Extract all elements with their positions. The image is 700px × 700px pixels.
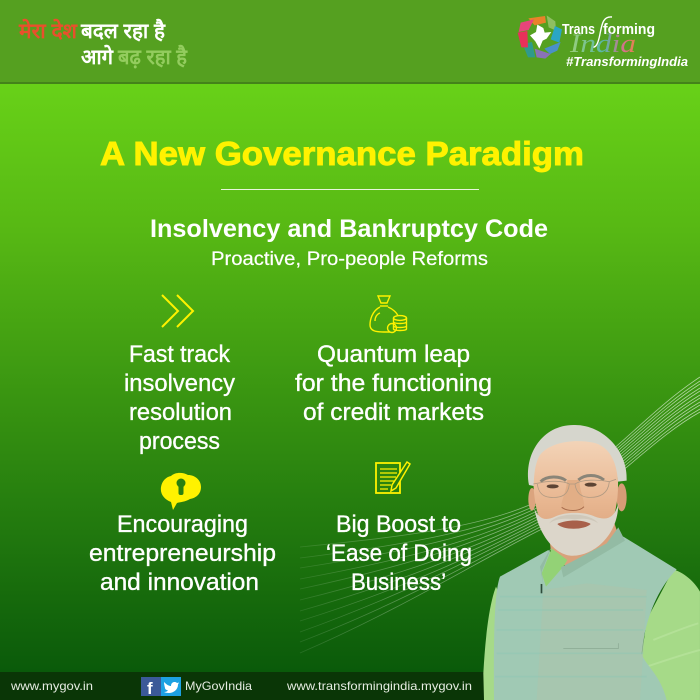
text: entrepreneurship: entrepreneurship	[89, 540, 276, 567]
transforming india logo: forming	[603, 21, 655, 38]
text: quantum leap: of credit markets	[303, 399, 484, 426]
transforming india logo: #TransformingIndia	[566, 54, 688, 69]
text: fast track	[124, 341, 235, 455]
icon: money bag	[370, 296, 406, 332]
text: entrepreneurship	[89, 511, 276, 596]
title divider	[221, 189, 479, 190]
hindi slogan: बढ़ रहा है	[117, 44, 188, 69]
eyebrows	[541, 475, 604, 482]
ears	[528, 488, 536, 511]
footer handle: MyGovIndia	[185, 679, 252, 693]
text: fast track: resolution	[129, 399, 232, 426]
footer website: www.mygov.in	[10, 679, 93, 693]
mustache and lips	[549, 515, 598, 523]
item: entrepreneurship	[89, 473, 276, 596]
icon: facebook	[141, 677, 161, 698]
portrait	[483, 425, 700, 700]
hindi slogan	[18, 18, 188, 69]
face	[533, 438, 618, 547]
transforming india logo	[518, 15, 688, 69]
decorative wave lines	[300, 377, 700, 653]
hindi slogan: मेरा देश	[18, 18, 78, 43]
shirt sleeves	[483, 569, 700, 700]
shirt collar	[542, 548, 567, 587]
text: ease of doing business: ‘Ease of Doing	[326, 540, 472, 567]
text: fast track: Fast track	[129, 341, 231, 368]
nose	[561, 480, 584, 510]
transforming india logo: Trans	[562, 21, 595, 38]
text: quantum leap: for the functioning	[295, 370, 492, 397]
jacket collar	[540, 527, 625, 585]
icon: facebook: f	[147, 679, 153, 698]
text: fast track: insolvency	[124, 370, 235, 397]
icon: twitter	[161, 677, 181, 696]
tagline: Proactive, Pro-people Reforms	[211, 249, 488, 270]
icon: notepad and pen	[376, 462, 410, 493]
item: ease of doing business	[326, 462, 472, 596]
hindi slogan: आगे	[81, 44, 114, 69]
text: entrepreneurship: and innovation	[100, 569, 259, 596]
title: A New Governance Paradigm	[100, 135, 584, 172]
icon: double chevron	[162, 295, 193, 327]
header bar	[0, 0, 700, 84]
text: quantum leap	[295, 341, 492, 426]
text: quantum leap: Quantum leap	[317, 341, 470, 368]
transforming india logo: India	[569, 29, 636, 58]
item: quantum leap	[295, 296, 492, 426]
jacket	[494, 537, 677, 700]
neck	[548, 520, 620, 567]
subtitle: Insolvency and Bankruptcy Code	[150, 215, 548, 243]
footer portal url: www.transformingindia.mygov.in	[286, 679, 472, 693]
footer bar	[0, 672, 700, 700]
glasses	[533, 479, 616, 497]
text: fast track: process	[139, 428, 220, 455]
text: ease of doing business: Business’	[351, 569, 446, 596]
eyes	[547, 484, 559, 488]
hair	[528, 425, 627, 486]
text: ease of doing business	[326, 511, 472, 596]
icon: thought bubble with keyhole	[161, 473, 201, 510]
item: fast track	[124, 295, 235, 455]
text: entrepreneurship: Encouraging	[117, 511, 248, 538]
hindi slogan: बदल रहा है	[80, 18, 166, 43]
logo ring	[518, 15, 562, 59]
text: ease of doing business: Big Boost to	[336, 511, 461, 538]
beard	[534, 503, 618, 556]
